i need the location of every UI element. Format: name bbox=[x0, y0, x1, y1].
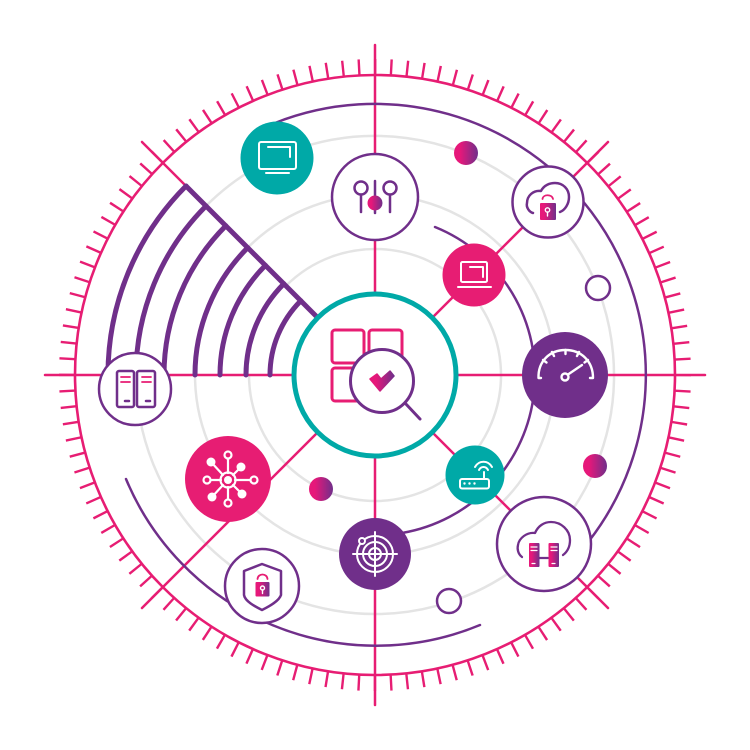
gradient dot top bbox=[454, 141, 478, 165]
icon: sliders bbox=[332, 154, 418, 240]
pink crosshair axes bbox=[45, 45, 705, 705]
icon: monitor bbox=[240, 122, 314, 194]
open circle right bbox=[586, 276, 610, 300]
central magnifier emblem bbox=[294, 294, 456, 456]
icon: cloud servers bbox=[497, 497, 591, 591]
icon: cloud lock bbox=[512, 166, 584, 238]
purple orbit arcs bbox=[126, 104, 646, 646]
purple radar sweep wedge bbox=[108, 186, 318, 375]
icon: gauge bbox=[522, 332, 608, 418]
grey concentric rings bbox=[136, 136, 614, 614]
icon: servers bbox=[99, 353, 171, 425]
outer pink ring with ticks bbox=[67, 67, 683, 683]
icon: router bbox=[446, 446, 504, 504]
icon: laptop bbox=[442, 244, 506, 306]
gradient dot right bbox=[583, 454, 607, 478]
icon: magnifying glass bbox=[350, 350, 420, 419]
icon: target bbox=[339, 518, 411, 590]
open circle bottom bbox=[437, 589, 461, 613]
icon: app grid bbox=[332, 330, 402, 401]
icon: network hub bbox=[185, 436, 271, 522]
gradient dot lower left bbox=[309, 477, 333, 501]
icon: shield lock bbox=[225, 549, 299, 623]
